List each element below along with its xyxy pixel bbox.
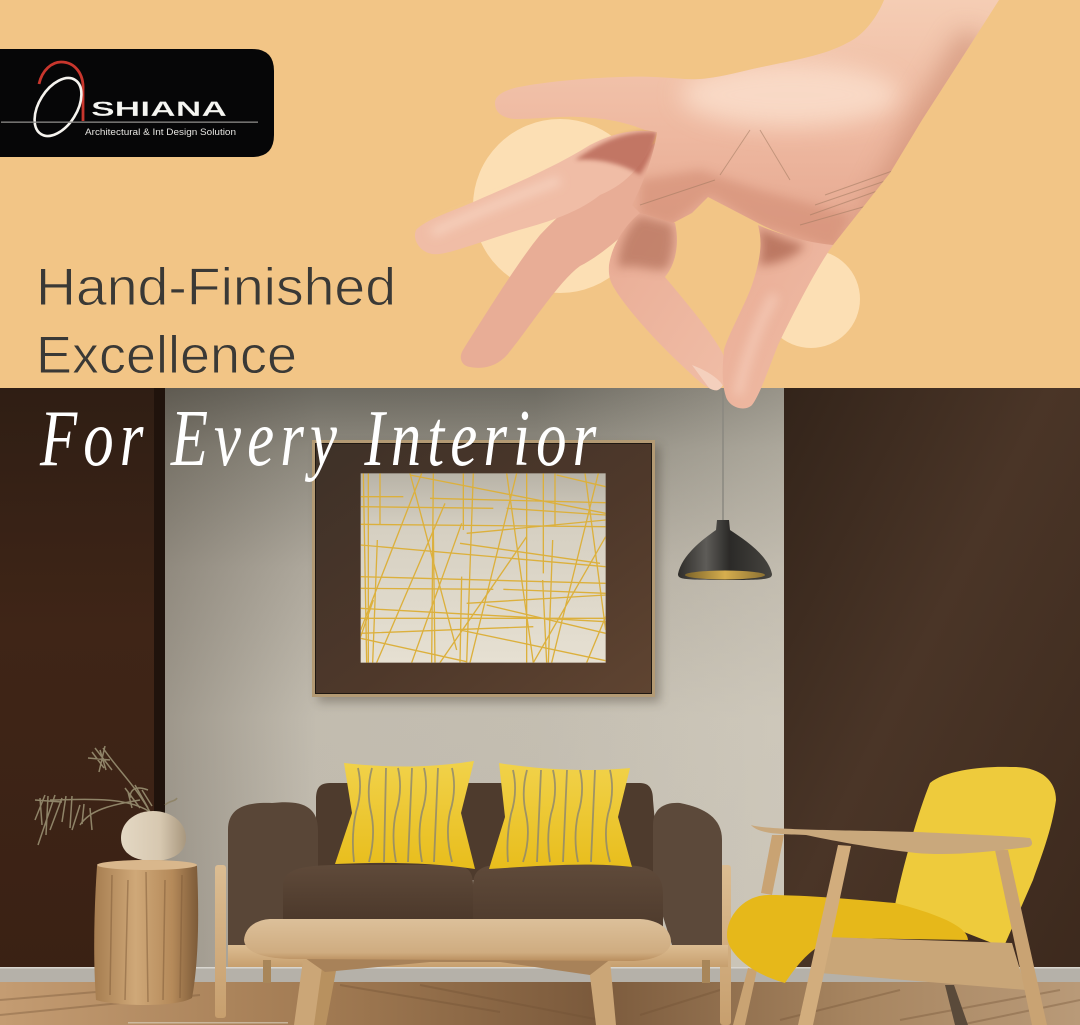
chair yellow seat: [727, 895, 968, 983]
chair armrest: [751, 825, 1032, 854]
chair rear legs: [733, 835, 968, 1025]
side stump table with vase and plant: [35, 746, 198, 1005]
stump: [94, 860, 198, 1005]
chair back post: [995, 850, 1047, 1025]
logo badge: [0, 49, 274, 157]
right arm: [653, 803, 722, 945]
logo wordmark: SHIANA: [91, 97, 227, 121]
pointing finger: [415, 131, 657, 254]
art canvas with gold lines: [361, 473, 606, 663]
palm and index finger: [495, 0, 999, 248]
left yellow pillow: [335, 761, 475, 869]
vase: [121, 811, 186, 861]
chair yellow back: [895, 767, 1056, 944]
sofa frame and legs: [215, 865, 731, 1025]
baseboard: [0, 967, 1080, 982]
armchair: [727, 767, 1056, 1025]
bent finger: [609, 213, 726, 392]
hand pinching lamp cord: [415, 0, 999, 408]
center wall: [160, 388, 784, 988]
left arm: [228, 802, 318, 945]
sofa back: [316, 783, 660, 880]
loveseat sofa: [215, 761, 731, 1025]
pendant lamp: [678, 388, 772, 580]
right dark wall: [784, 388, 1080, 988]
logo divider line: [1, 122, 258, 123]
peach background panel: [0, 0, 1080, 388]
table top: [244, 919, 671, 961]
table legs: [294, 958, 616, 1025]
headline: Hand-Finished Excellence: Hand-Finished: [36, 258, 396, 317]
left dark wall: [0, 388, 165, 988]
decorative pale circles behind hand: [473, 119, 860, 348]
thumb: [723, 225, 833, 408]
chair front leg: [798, 845, 851, 1025]
wood floor: [0, 982, 1080, 1025]
right yellow pillow: [489, 763, 632, 869]
seat cushions: [283, 865, 663, 945]
coffee table: [244, 919, 671, 1025]
framed wall art: [312, 440, 660, 702]
dried plant: [35, 746, 177, 845]
logo tagline: Architectural & Int Design Solution: [85, 127, 236, 137]
interior room photo: [0, 388, 1080, 1025]
logo emblem ring and arc: [25, 62, 91, 144]
headline: Hand-Finished Excellence: [36, 258, 396, 385]
script subtitle: For Every Interior: For Every Interior: [39, 395, 597, 483]
ring finger: [461, 140, 660, 368]
chair wooden rail: [820, 937, 1026, 990]
headline: Hand-Finished Excellence: Excellence: [36, 326, 297, 385]
